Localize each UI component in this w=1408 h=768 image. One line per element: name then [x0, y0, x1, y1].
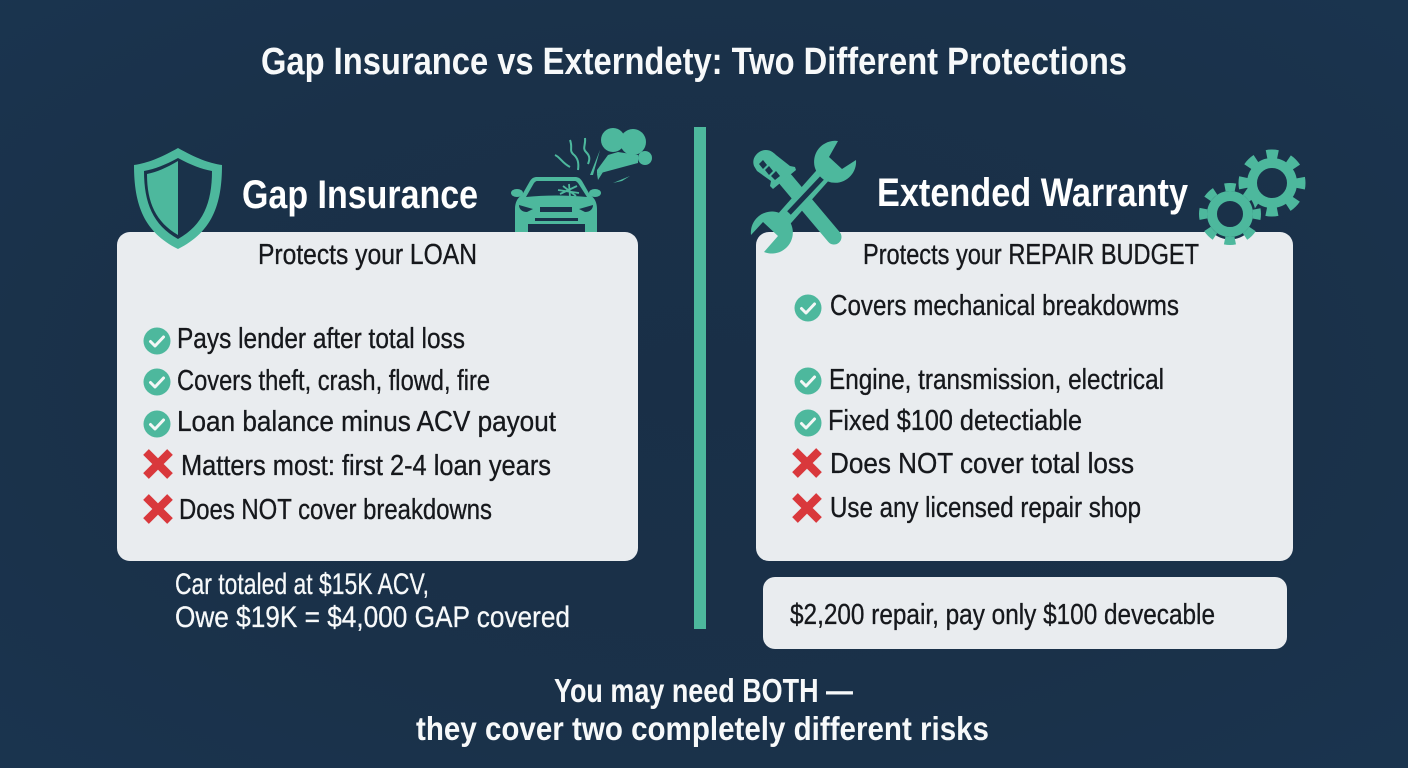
footer conclusion: [416, 672, 989, 747]
list item: engine: Engine, transmission, electrical: [829, 364, 1164, 396]
panel: gap insurance: [117, 128, 652, 561]
icon: crashed car: [511, 128, 652, 232]
divider between columns: [694, 127, 706, 629]
list item: repair shop: Use any licensed repair shop: [830, 492, 1141, 524]
list item: no breakdowns: Does NOT cover breakdowns: [179, 494, 492, 526]
list item: mechanical: Covers mechanical breakdowms: [830, 290, 1179, 322]
extended warranty card: [756, 232, 1293, 561]
callout: gap example: Car totaled at $15K ACV,: [175, 568, 429, 601]
callout: gap example: [175, 568, 570, 634]
list item: loan balance: Loan balance minus ACV payout: [177, 406, 556, 438]
subheading: protects your loan: Protects your LOAN: [258, 239, 477, 271]
callout: gap example: Owe $19K = $4,000 GAP covered: [175, 601, 570, 634]
list item: deductible: Fixed $100 detectiable: [828, 405, 1082, 437]
callout: warranty example: $2,200 repair, pay only $100 devecable: [790, 599, 1215, 631]
heading: extended warranty: Extended Warranty: [877, 171, 1189, 215]
gap insurance card: [117, 232, 638, 561]
footer conclusion: You may need BOTH —: [554, 672, 853, 709]
title: Gap Insurance vs Externdety: Two Different Protections: [261, 41, 1127, 83]
panel: extended warranty: [751, 141, 1301, 561]
heading: gap insurance: Gap Insurance: [242, 173, 478, 217]
footer conclusion: they cover two completely different risks: [416, 710, 989, 747]
icon: shield: [134, 148, 222, 249]
icon: crossed tools: [751, 141, 856, 254]
list item: matters most: Matters most: first 2-4 loan years: [181, 450, 551, 482]
list item: pays lender: Pays lender after total loss: [177, 323, 465, 355]
subheading: protects repair budget: Protects your REPAIR BUDGET: [863, 239, 1199, 271]
callout: warranty example: [763, 577, 1287, 649]
icon: gears: [1203, 154, 1301, 241]
list item: no total loss: Does NOT cover total loss: [830, 448, 1134, 480]
list item: covers theft: Covers theft, crash, flowd, fire: [177, 365, 490, 397]
